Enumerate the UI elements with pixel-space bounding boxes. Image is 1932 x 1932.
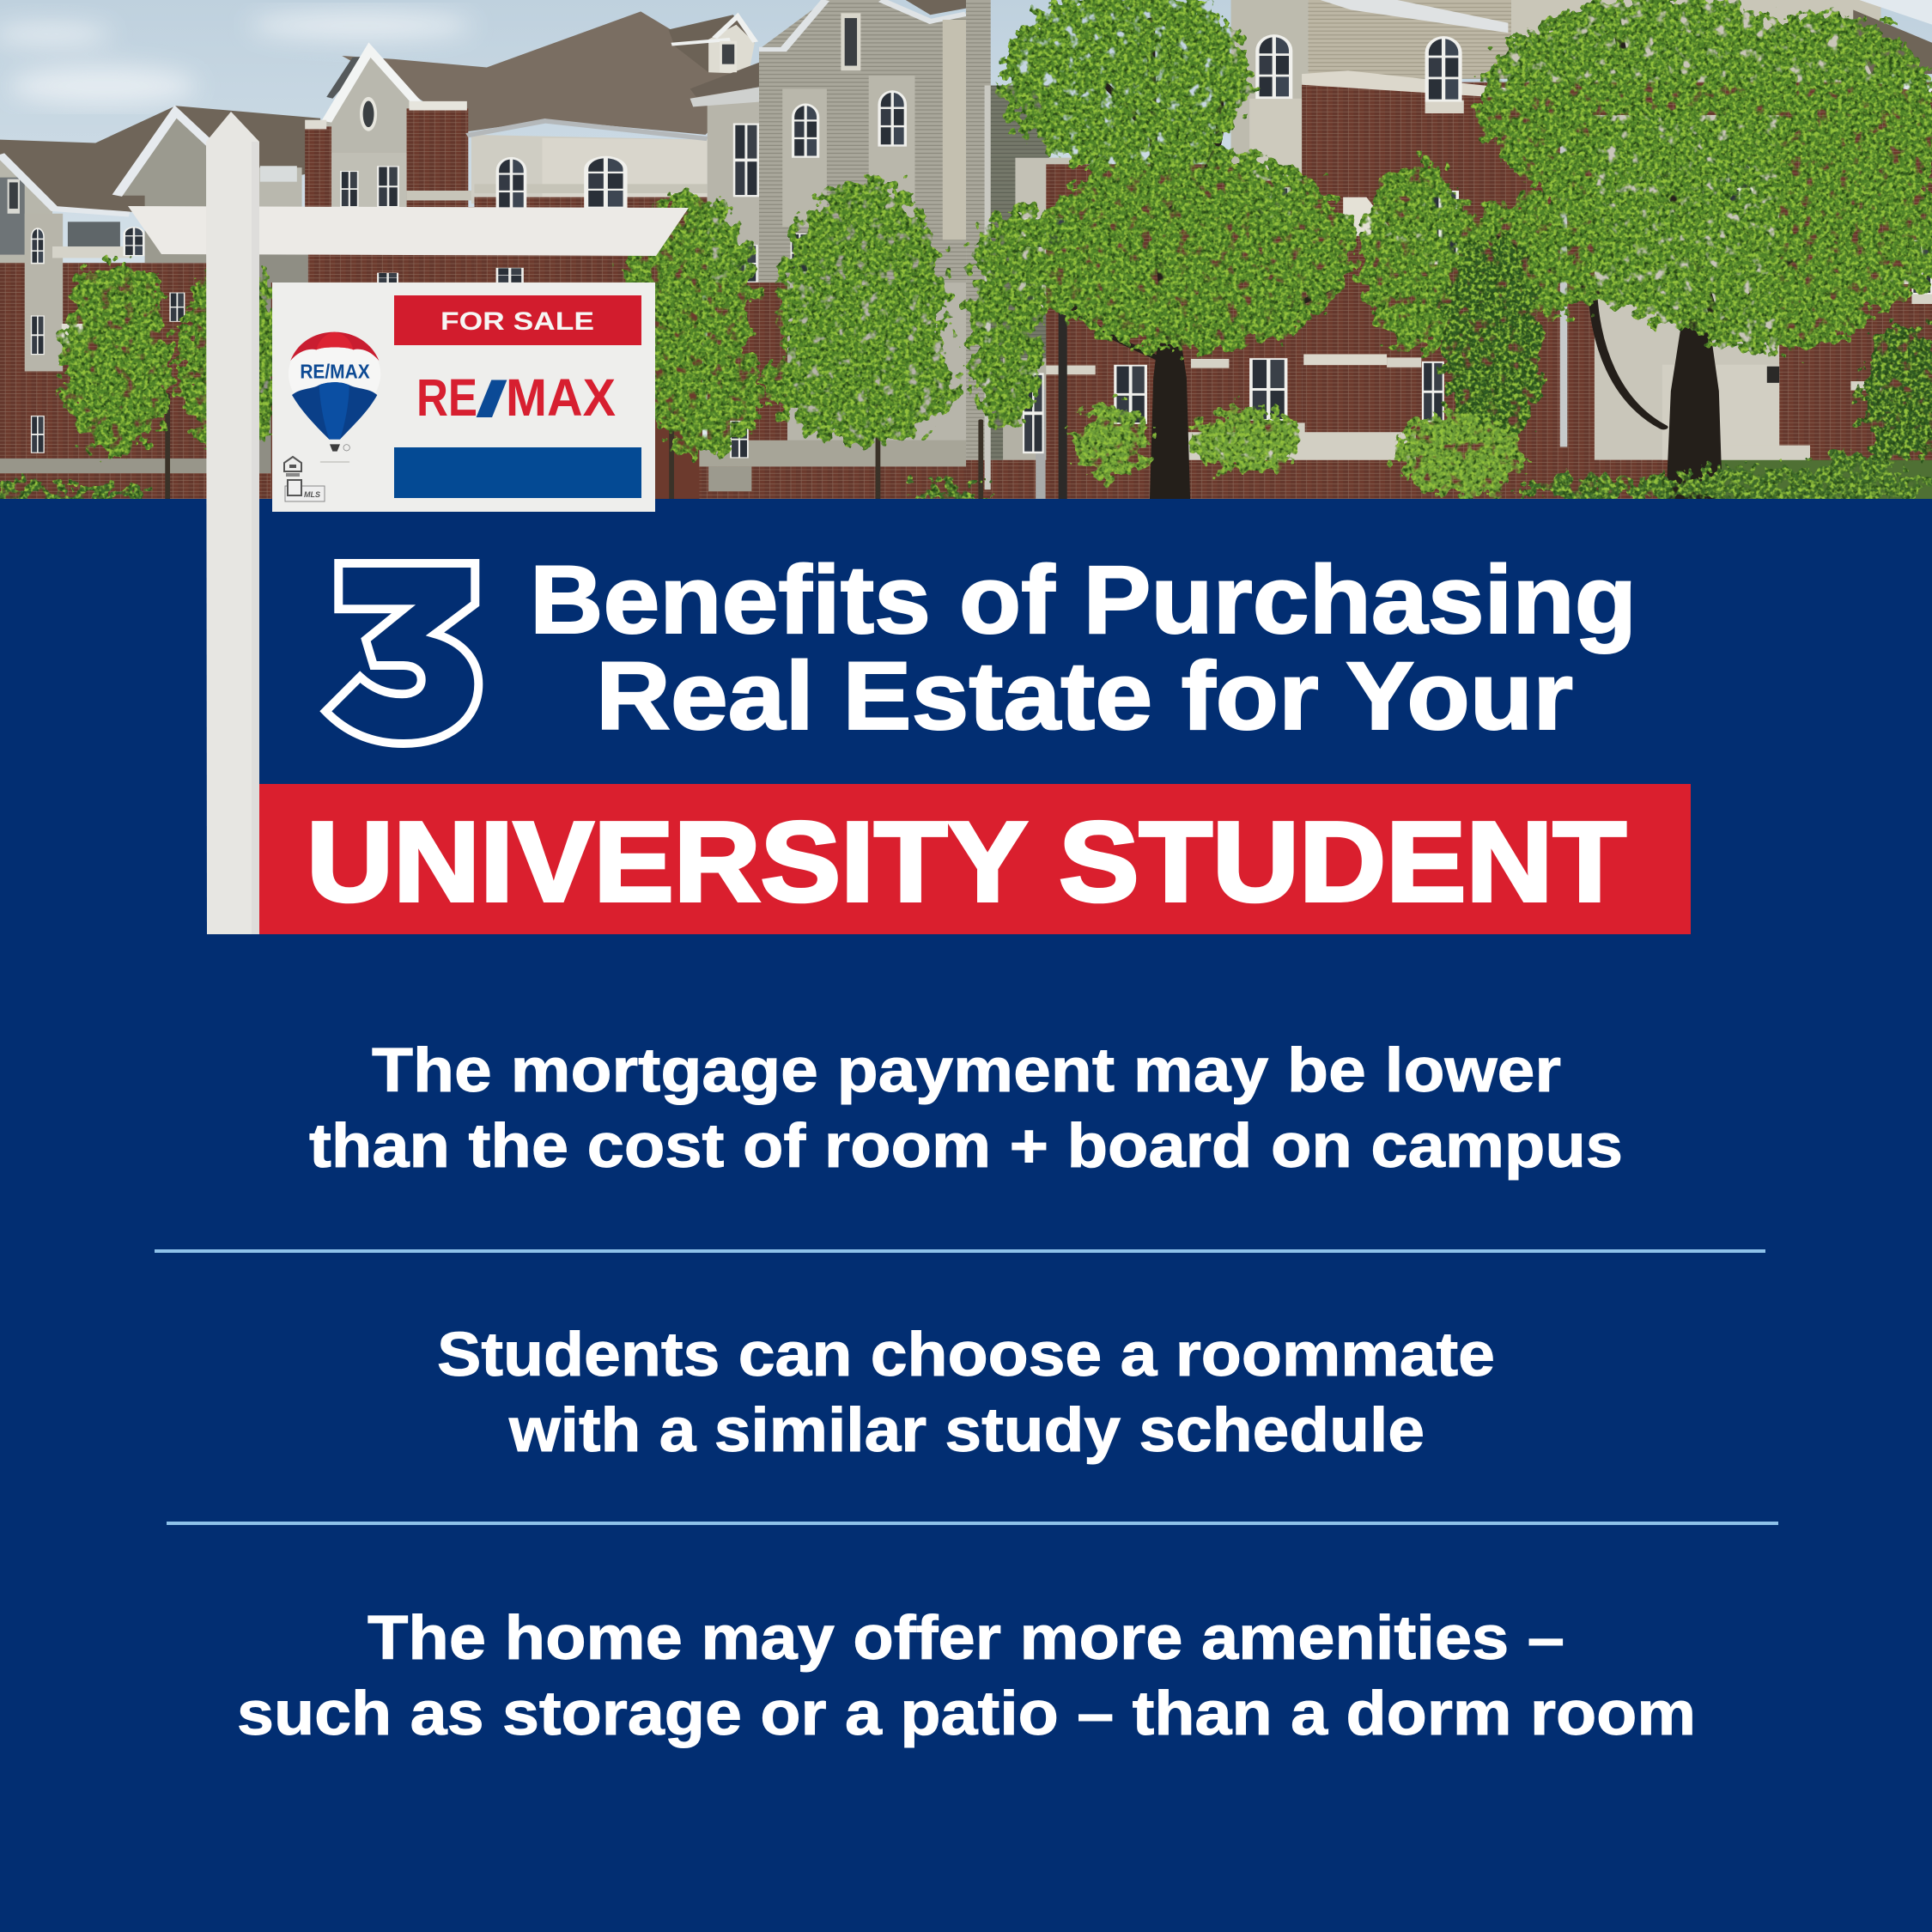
benefit 2: with a similar study schedule [508,1396,1425,1465]
heading line 1: Benefits of Purchasing [530,546,1637,653]
RE/MAX wordmark: MAX [506,368,616,427]
benefit 3: The home may offer more amenities – [368,1604,1564,1673]
benefit 3: such as storage or a patio – than a dorm room [237,1680,1696,1748]
icon: realtor MLS [285,480,325,501]
tree trunks [1150,313,1722,503]
building block: brick corner wing [966,0,1932,501]
RE/MAX wordmark: RE [416,368,477,427]
for sale sign board [272,283,655,512]
for sale banner [394,295,641,345]
red banner: university student: UNIVERSITY STUDENT [307,799,1626,925]
tree branches behind foliage [167,9,1848,500]
icon: outlined number 3 [325,563,478,744]
benefit 2: Students can choose a roommate [437,1321,1495,1389]
benefit 1 [309,1036,1623,1181]
hero photo: campus building with trees [0,0,1932,505]
benefit 1: than the cost of room + board on campus [309,1112,1623,1181]
heading line 2: Real Estate for Your [596,642,1573,750]
RE/MAX wordmark: / [477,372,507,426]
post [206,112,259,934]
title [325,546,1637,750]
icon: RE/MAX balloon: RE/MAX [300,361,370,383]
building block: gray tower [690,0,966,501]
windows [8,13,907,458]
sign post assembly [128,112,689,934]
building block: left wing [0,106,320,503]
building block: center wing with big roof [271,11,758,503]
icon: realtor MLS: MLS [304,490,320,499]
benefit 1: The mortgage payment may be lower [372,1036,1561,1105]
for sale banner: FOR SALE [440,307,594,336]
crossbar [128,206,689,256]
right half of building [966,0,1932,501]
blue banner [394,447,641,498]
icon: RE/MAX balloon [289,332,380,463]
trees and shrubs [62,0,1932,496]
benefit 3 [237,1604,1696,1748]
icon: equal housing [284,457,301,477]
sky [0,0,1932,499]
RE/MAX wordmark [416,368,616,427]
benefit 2 [437,1321,1495,1465]
hedge at the base of the building [0,450,1932,505]
